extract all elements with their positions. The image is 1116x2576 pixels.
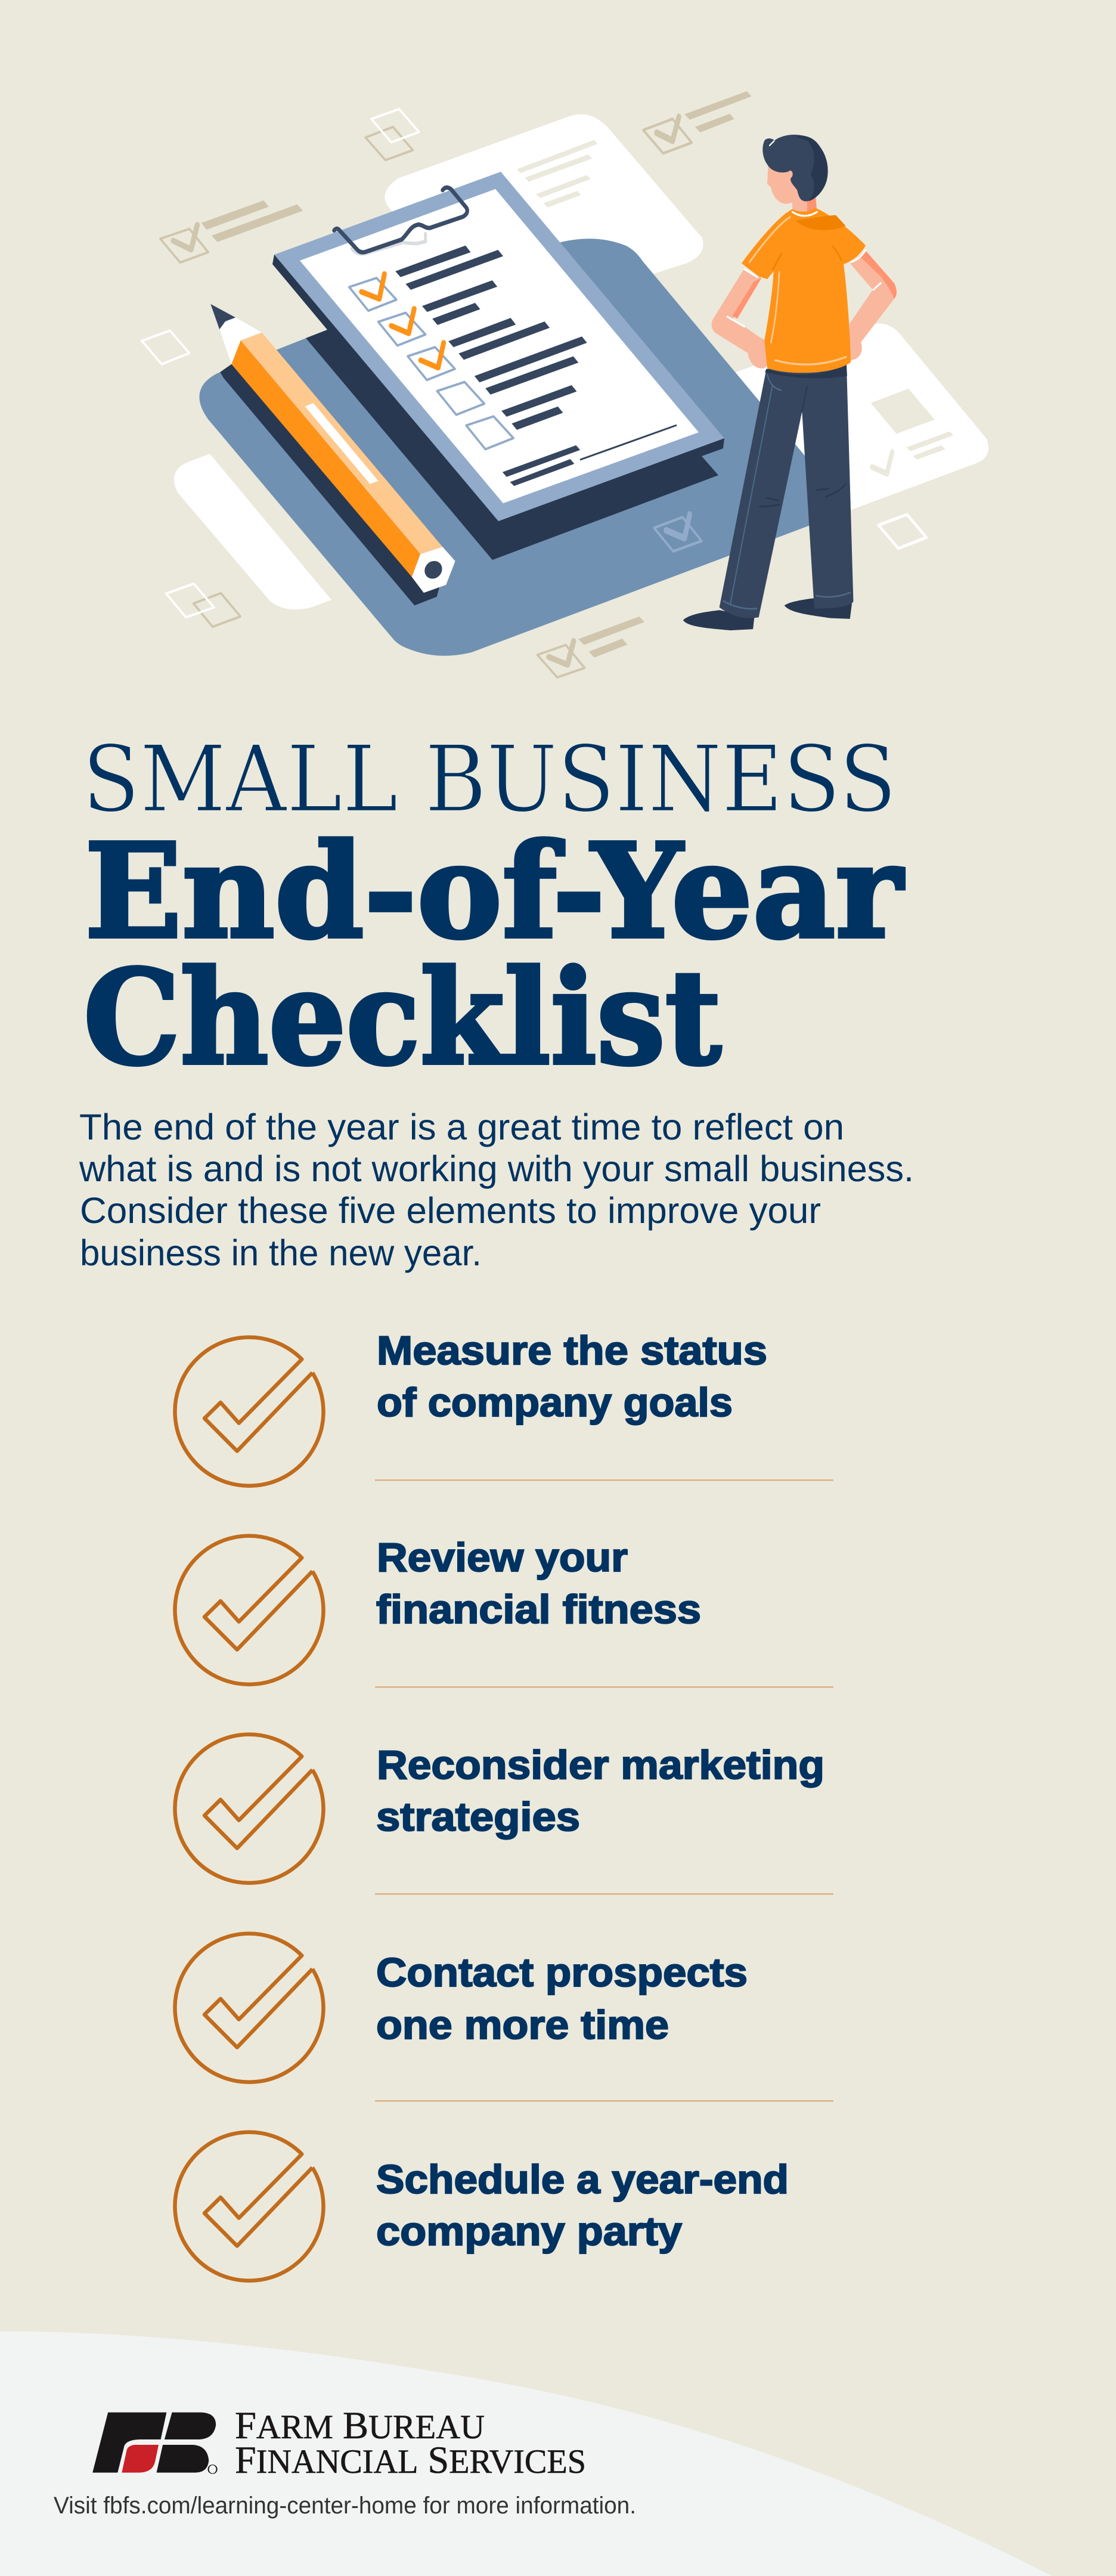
item 3 text: Reconsider marketing	[377, 1742, 824, 1788]
orange shirt	[742, 208, 866, 373]
item 2 icon: circle check	[175, 1536, 323, 1685]
intro paragraph: Consider these five elements to improve your	[80, 1190, 821, 1231]
pencil	[210, 304, 455, 605]
neck	[792, 194, 817, 215]
item 2 text: Review your	[377, 1535, 628, 1580]
document contents	[871, 389, 953, 473]
pencil tip	[219, 317, 262, 364]
item 5 text: Schedule a year-end	[376, 2157, 789, 2202]
item 5 icon: circle check	[175, 2132, 323, 2281]
tan checkbox top right	[643, 91, 752, 153]
item 5 text: company party	[376, 2209, 682, 2254]
footer background curve	[0, 2332, 1052, 2576]
illustration: man with clipboard and pencil	[142, 91, 988, 677]
face	[767, 165, 801, 204]
pencil eraser hole	[423, 558, 444, 581]
white square left	[142, 330, 190, 364]
signature line	[580, 425, 677, 460]
intro paragraph: business in the new year.	[80, 1233, 482, 1273]
pencil body dark orange	[231, 340, 420, 577]
item 1 text: of company goals	[377, 1380, 733, 1425]
item 1 text: Measure the status	[377, 1328, 767, 1373]
logo wordmark: FINANCIAL SERVICES	[235, 2439, 586, 2482]
blue base shape	[199, 239, 823, 656]
white page top	[385, 114, 703, 292]
right arm	[850, 250, 897, 360]
title line: Checklist: Checklist	[83, 942, 721, 1094]
pencil end	[412, 547, 455, 593]
floating icons and man	[643, 91, 953, 630]
white bar lower left	[174, 454, 331, 609]
shoes	[683, 598, 852, 630]
clip	[334, 188, 467, 254]
clipboard contents	[334, 188, 587, 486]
white square right	[879, 515, 926, 549]
intro paragraph: The end of the year is a great time to reflect on	[79, 1107, 844, 1147]
title line: SMALL BUSINESS: SMALL BUSINESS	[82, 726, 897, 833]
item 3 icon: circle check	[175, 1735, 323, 1883]
logo wordmark: FARM BUREAU	[235, 2404, 485, 2447]
pencil lead	[210, 304, 235, 329]
white document right	[736, 324, 988, 525]
overlapping squares lower left	[166, 584, 240, 627]
footer	[0, 2332, 1052, 2576]
checkboxes	[349, 278, 513, 449]
overlapping squares top	[365, 109, 419, 160]
title line: End-of-Year: End-of-Year	[85, 815, 904, 968]
intro paragraph: what is and is not working with your small business.	[79, 1148, 914, 1189]
clipboard	[272, 172, 724, 560]
checklist	[175, 1328, 833, 2281]
pencil body light orange	[241, 333, 442, 554]
item 1 text	[377, 1328, 767, 1425]
website note: Visit fbfs.com/learning-center-home for more information.	[54, 2493, 636, 2519]
tan checkbox top left	[160, 200, 303, 262]
item 3 text: strategies	[376, 1794, 580, 1840]
floating check icons left group	[142, 109, 644, 677]
pencil highlight	[305, 403, 379, 484]
item 2 text	[376, 1535, 701, 1632]
title	[82, 726, 904, 1094]
clipboard paper	[300, 189, 699, 503]
light blue checkbox on base	[654, 515, 702, 551]
tan checkbox bottom	[537, 617, 644, 677]
item 4 text	[376, 1950, 748, 2048]
item 4 icon: circle check	[175, 1934, 323, 2082]
item 5 text	[376, 2157, 789, 2254]
man	[683, 135, 897, 630]
item 4 text: Contact prospects	[376, 1950, 748, 1995]
intro paragraph	[79, 1107, 914, 1273]
trousers	[720, 365, 853, 618]
clipboard shadow and thickness	[272, 255, 724, 560]
left arm	[712, 270, 771, 369]
hair	[762, 135, 828, 202]
clipboard board	[274, 172, 724, 521]
lines on white page	[517, 140, 597, 208]
item 3 text	[376, 1742, 824, 1840]
checklist text lines	[395, 246, 587, 486]
item 1 icon: circle check	[175, 1337, 323, 1486]
orange check marks	[361, 274, 444, 368]
pencil shadow	[220, 364, 441, 605]
item 2 text: financial fitness	[376, 1587, 701, 1632]
logo mark	[92, 2413, 217, 2473]
logo wordmark	[235, 2404, 586, 2482]
item 4 text: one more time	[376, 2002, 669, 2048]
